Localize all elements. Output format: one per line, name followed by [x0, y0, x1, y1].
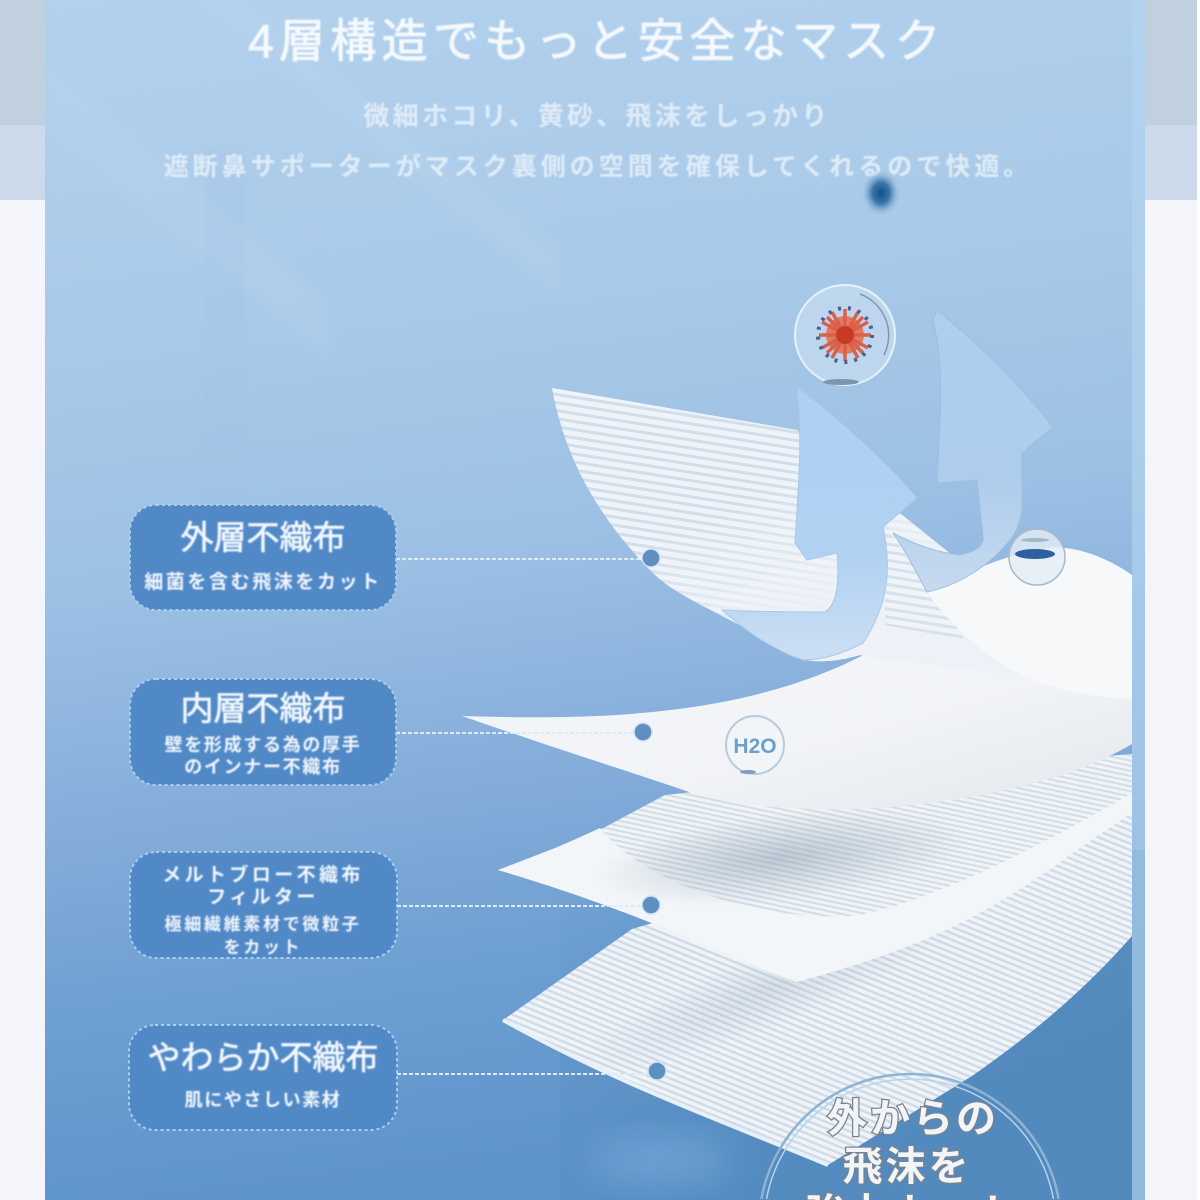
icon: H2O bubble: H2O	[733, 735, 777, 758]
layer 3: meltblown filter sheet	[498, 754, 1132, 982]
label: meltblown filter: メルトブロー不織布	[162, 863, 364, 886]
icon: virus in bubble	[795, 285, 895, 385]
label: outer nonwoven	[130, 505, 396, 610]
label: inner nonwoven	[130, 679, 396, 785]
callout: circle badge: 外からの	[827, 1097, 999, 1141]
bottom shadow patch	[590, 1136, 730, 1184]
callout: circle badge: 飛沫を	[842, 1145, 972, 1189]
arrow: back upward arrow	[893, 310, 1053, 592]
connector lines	[396, 559, 650, 1074]
label: meltblown filter: をカット	[224, 938, 302, 957]
icon: small particle	[861, 169, 901, 217]
label: soft nonwoven: 肌にやさしい素材	[185, 1090, 341, 1110]
label: inner nonwoven: 壁を形成する為の厚手	[164, 734, 362, 755]
callout: circle badge	[760, 1072, 1060, 1200]
subtitle text block: 遮断鼻サポーターがマスク裏側の空間を確保してくれるので快適。	[164, 152, 1032, 181]
label: inner nonwoven: のインナー不織布	[184, 757, 342, 777]
label: inner nonwoven: 内層不織布	[180, 690, 346, 727]
icon: water molecule bubble	[1009, 529, 1065, 585]
label: meltblown filter: フィルター	[207, 886, 319, 908]
label: meltblown filter	[130, 852, 397, 958]
label: outer nonwoven: 細菌を含む飛沫をカット	[144, 571, 382, 593]
arrow: front upward arrow	[722, 387, 917, 660]
layer 2: inner nonwoven sheet	[462, 620, 1132, 809]
subtitle text block: 微細ホコリ、黄砂、飛沫をしっかり	[363, 101, 831, 131]
marker dots	[634, 549, 666, 1080]
label: soft nonwoven: やわらか不織布	[148, 1039, 378, 1076]
label: meltblown filter: 極細繊維素材で微粒子	[164, 915, 362, 934]
icon: H2O bubble	[726, 716, 784, 774]
label: outer nonwoven: 外層不織布	[180, 519, 346, 556]
label: soft nonwoven	[129, 1025, 397, 1130]
layer 1: outer nonwoven sheet	[552, 388, 1132, 699]
title: 4層構造でもっと安全なマスク	[248, 15, 946, 67]
subtitle text block	[164, 101, 1032, 181]
layer 4: soft nonwoven sheet	[503, 800, 1132, 1165]
